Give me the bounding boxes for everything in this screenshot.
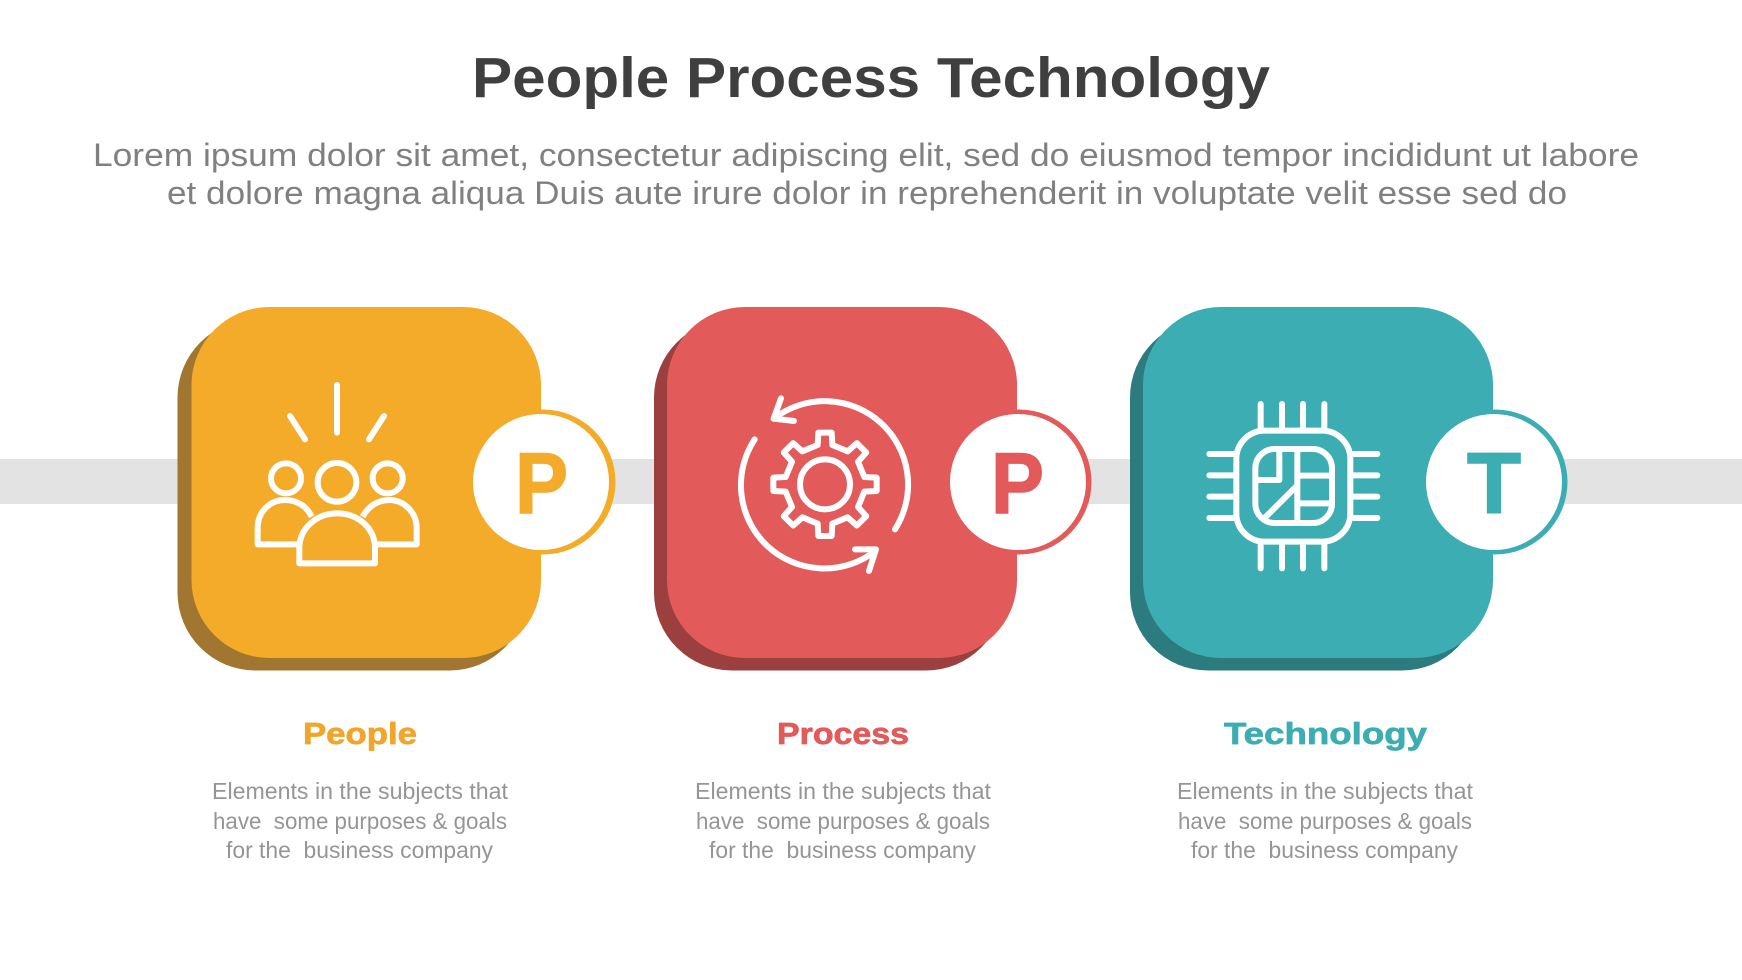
badge: P: [470, 410, 616, 554]
text block: technology: Elements in the subjects that: [1177, 778, 1474, 804]
square shadow: process: [654, 320, 1004, 670]
panel: technology: [1130, 307, 1568, 670]
square: process: [667, 307, 1017, 658]
text block: process: for the business company: [709, 837, 976, 863]
text block: process: have some purposes & goals: [696, 808, 990, 834]
square shadow: technology: [1130, 320, 1480, 670]
horizontal connecting band: [0, 459, 1742, 504]
badge: P: P: [515, 436, 568, 532]
text block: people: People: [303, 716, 417, 751]
panel: people: [178, 307, 616, 670]
panel: process: [654, 307, 1092, 670]
text block: technology: [1177, 716, 1474, 863]
badge: P: [946, 410, 1092, 554]
text block: people: [212, 716, 509, 863]
square: technology: [1143, 307, 1493, 658]
text block: people: for the business company: [226, 837, 493, 863]
title: People Process Technology: [472, 46, 1270, 110]
text block: people: have some purposes & goals: [213, 808, 507, 834]
text block: process: [695, 716, 992, 863]
text block: process: Process: [777, 716, 909, 751]
icon: gear with cycle arrows: [741, 398, 908, 571]
badge: T: [1422, 410, 1568, 554]
subtitle text: [93, 137, 1639, 211]
text block: technology: Technology: [1224, 716, 1428, 751]
icon: microchip: [1209, 404, 1377, 568]
badge: P: P: [991, 436, 1044, 532]
icon: people group: [258, 385, 417, 563]
badge: T: T: [1467, 436, 1521, 532]
text block: technology: for the business company: [1191, 837, 1458, 863]
text block: process: Elements in the subjects that: [695, 778, 992, 804]
text block: people: Elements in the subjects that: [212, 778, 509, 804]
subtitle text: et dolore magna aliqua Duis aute irure dolor in reprehenderit in voluptate velit esse sed do: [167, 175, 1567, 211]
square: people: [192, 307, 541, 658]
square shadow: people: [178, 320, 528, 670]
text block: technology: have some purposes & goals: [1178, 808, 1472, 834]
subtitle text: Lorem ipsum dolor sit amet, consectetur adipiscing elit, sed do eiusmod tempor incididunt ut labore: [93, 137, 1639, 173]
